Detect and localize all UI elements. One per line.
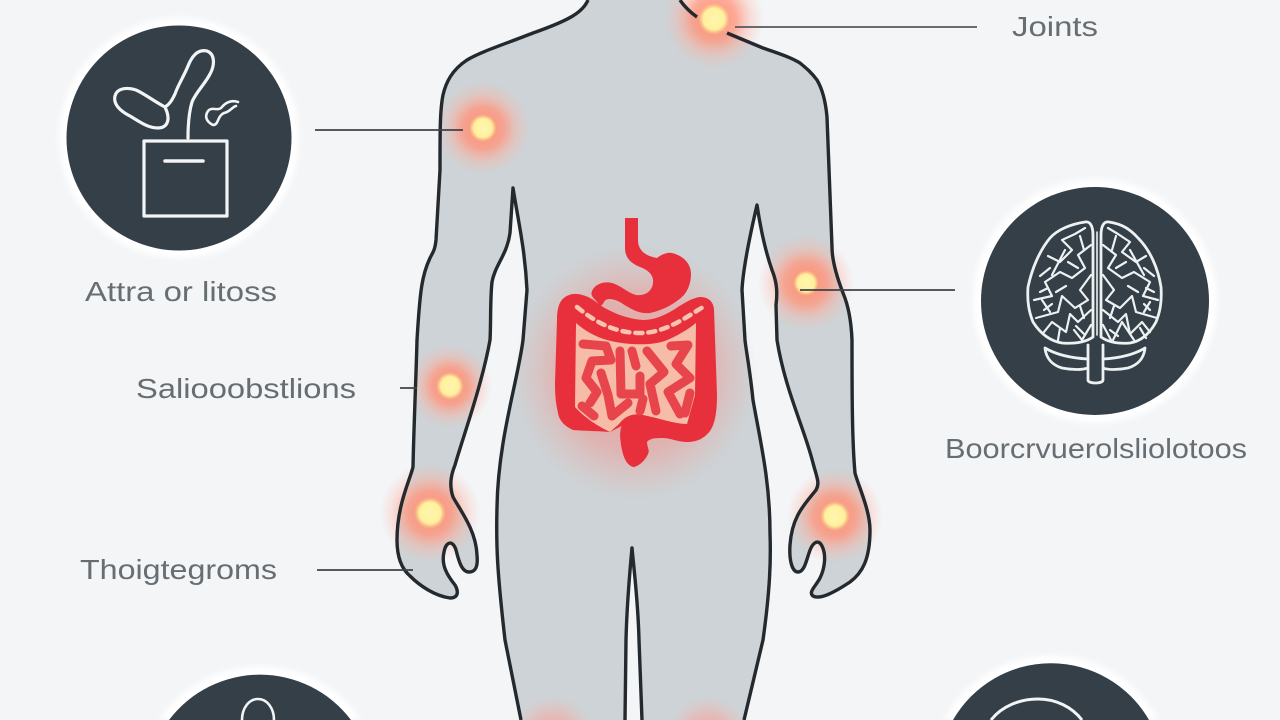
inflammation glow: right wrist <box>787 468 883 564</box>
leader line: joints <box>735 26 977 28</box>
panel: brain icon circle <box>973 179 1217 423</box>
label: left top: Attra or litoss <box>85 276 277 307</box>
leader line: forearm <box>400 387 417 389</box>
panel: bottom left icon circle <box>159 666 361 720</box>
circle halo <box>59 18 299 258</box>
label: left lower: Thoigtegroms <box>80 554 277 585</box>
label: joints: Joints <box>1012 11 1098 42</box>
panel: bottom right icon circle <box>944 655 1158 720</box>
colon <box>555 294 717 467</box>
leader line: hand <box>317 569 413 571</box>
circle <box>953 663 1149 720</box>
right wrist hotspot <box>820 501 850 531</box>
icon: arc outline <box>991 699 1082 720</box>
leader line: shoulder <box>315 129 463 131</box>
circle <box>981 187 1209 415</box>
label: right: Boorcrvuerolsliolotoos <box>945 433 1247 464</box>
inflammation glow: right elbow <box>758 235 854 331</box>
shoulder hotspot <box>469 114 497 142</box>
icon: foot, finger and box <box>115 51 238 216</box>
circle halo <box>944 655 1158 720</box>
icon: brain <box>1028 222 1161 383</box>
circle halo <box>159 666 361 720</box>
inflammation glow: left wrist <box>380 463 480 563</box>
body silhouette fill <box>397 0 870 720</box>
stomach and esophagus <box>591 218 691 313</box>
label: left middle: Saliooobstlions <box>136 373 356 404</box>
inflammation glow: right knee <box>666 696 750 720</box>
inflammation glow: left knee <box>511 696 595 720</box>
small intestine background <box>575 323 696 432</box>
inflammation glow: left forearm <box>408 344 492 428</box>
circle halo <box>973 179 1217 423</box>
icon: oval outline <box>242 699 274 720</box>
inflammation glow: abdomen <box>513 244 757 500</box>
circle <box>66 26 292 250</box>
body figure <box>380 0 883 720</box>
icon: stomach and intestines <box>555 218 717 467</box>
panel: digestive icon circle <box>59 18 299 258</box>
inflammation glow: shoulder <box>436 81 530 175</box>
forearm hotspot <box>436 372 464 400</box>
left wrist hotspot <box>414 497 446 529</box>
circle <box>169 675 351 720</box>
transverse colon dashes <box>577 307 703 333</box>
elbow hotspot <box>793 270 819 296</box>
body outline <box>397 0 870 720</box>
small intestine coils <box>582 344 690 416</box>
neck joint hotspot <box>698 3 730 35</box>
inflammation glow: neck <box>664 0 764 69</box>
leader line: elbow <box>800 289 955 291</box>
